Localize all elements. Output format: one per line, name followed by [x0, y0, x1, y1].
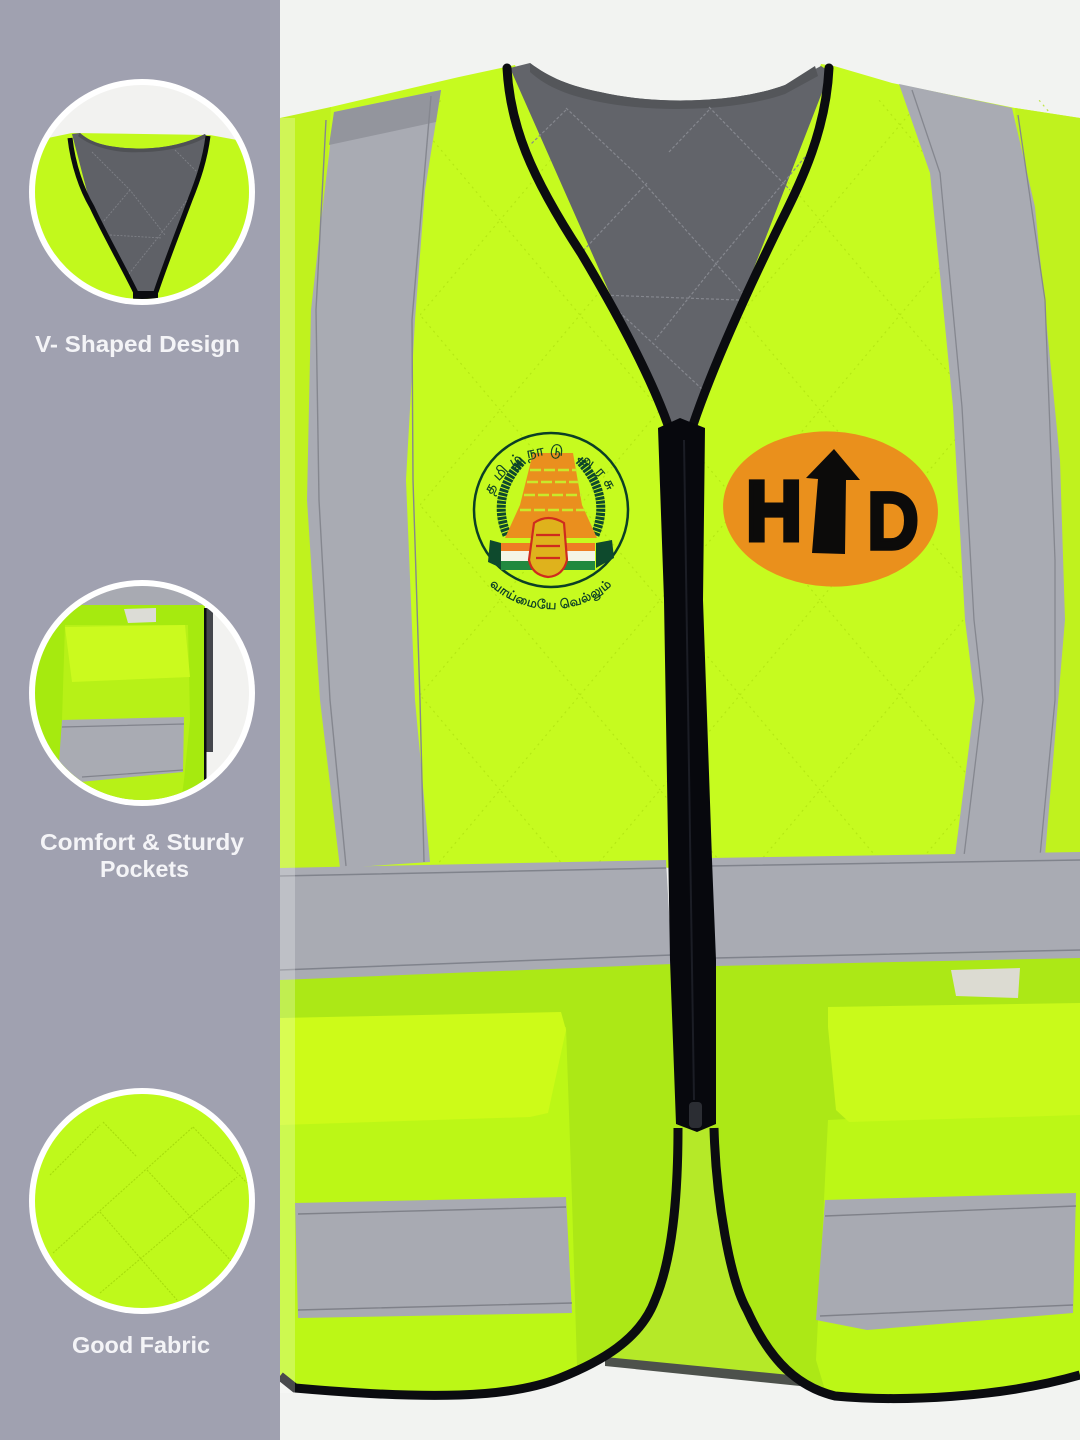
label: Comfort & Sturdy Pockets: Comfort & Sturdy	[40, 829, 244, 855]
vest lower body	[280, 945, 1080, 1415]
left pocket	[280, 1012, 578, 1400]
label tag	[951, 968, 1020, 998]
emblem lettering: top: தமிழ்நாடு அரசு	[486, 444, 614, 496]
feature 1: V-shaped design	[29, 79, 255, 357]
sidebar panel	[0, 0, 280, 1440]
front hem binding	[280, 1128, 1080, 1398]
quilted stitching	[420, 100, 1060, 865]
quilted lining at neck	[510, 63, 830, 425]
vest back hem seen through opening	[605, 1125, 800, 1386]
product photo: high-visibility vest	[280, 63, 1080, 1404]
faded left edge	[280, 118, 295, 1393]
circle image: fabric	[29, 1088, 255, 1315]
zipper	[658, 418, 716, 1132]
left waist reflective band	[280, 860, 672, 980]
label: Good Fabric: Good Fabric	[72, 1332, 210, 1358]
HID arrow	[806, 449, 860, 554]
right shoulder reflective strip	[899, 84, 1065, 856]
Tamil Nadu emblem	[472, 432, 630, 588]
circle image: neck	[29, 79, 255, 307]
neck binding	[507, 68, 829, 425]
vest upper body	[280, 64, 1080, 875]
circle image: pocket	[29, 580, 255, 810]
emblem motto: வாய்மையே வெல்லும்	[490, 581, 611, 610]
label: V- Shaped Design: V- Shaped Design	[35, 331, 240, 357]
right pocket	[816, 1003, 1080, 1400]
HID letter H: H	[746, 464, 802, 558]
feature 2: comfort and sturdy pockets	[29, 580, 255, 882]
HID badge	[719, 426, 942, 592]
right waist reflective band	[710, 852, 1080, 966]
HID letter D: D	[867, 476, 919, 567]
feature 3: good fabric	[29, 1088, 255, 1358]
label: Comfort & Sturdy Pockets: Pockets	[100, 856, 189, 882]
left shoulder reflective strip	[307, 90, 441, 868]
vest side panels	[280, 107, 1080, 870]
